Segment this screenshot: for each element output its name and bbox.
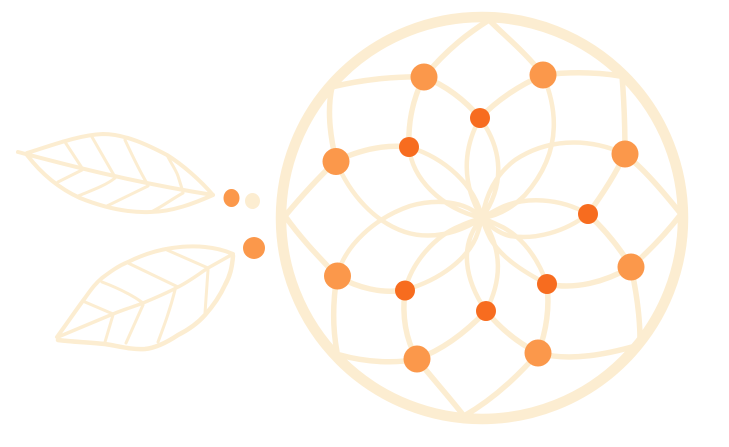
upper leaf bbox=[18, 134, 213, 212]
bead: orange between leaves bbox=[224, 189, 240, 207]
bead: lower orange bbox=[243, 237, 265, 259]
bead: pale between leaves bbox=[245, 193, 260, 209]
outer web frame bbox=[285, 20, 681, 416]
outer ring bbox=[281, 17, 683, 419]
dreamcatcher: ring and web bbox=[281, 17, 683, 419]
large orange beads bbox=[322, 62, 644, 372]
small dark orange beads bbox=[395, 108, 598, 321]
lower leaf bbox=[57, 246, 233, 349]
inner petals bbox=[336, 75, 625, 311]
